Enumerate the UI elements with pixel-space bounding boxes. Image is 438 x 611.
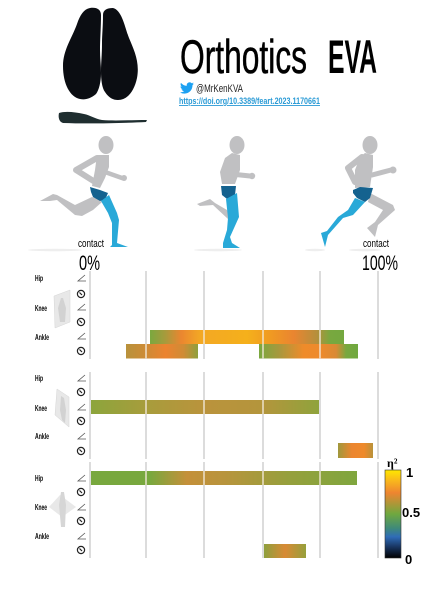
title: EVA [328, 30, 377, 83]
twitter handle: @MrKenKVA [196, 83, 243, 95]
rear leg [40, 194, 102, 216]
grid lines [90, 271, 378, 359]
title: Orthotics [180, 30, 307, 83]
torso [220, 153, 240, 184]
0 percent label: 0% [79, 252, 100, 275]
joint labels: Ankle [35, 532, 49, 541]
runner: initial contact [28, 136, 128, 251]
joint labels: Hip [35, 374, 43, 383]
icon: plane body [49, 492, 76, 527]
panel: sagittal plane [35, 271, 378, 359]
legend ticks: 0 [405, 552, 412, 567]
arms [76, 158, 127, 182]
contact label left: contact [78, 238, 104, 250]
heat bars [126, 330, 358, 358]
joint labels: Hip [35, 474, 43, 483]
runner: toe off [305, 136, 396, 251]
heat bars [91, 471, 357, 558]
angle and moment icons [77, 475, 86, 554]
rear leg [197, 199, 231, 219]
angle and moment icons [77, 275, 86, 355]
rear leg [367, 193, 395, 237]
icon: left insole [63, 8, 101, 99]
doi link: https://doi.org/10.3389/feart.2023.1170661 [179, 96, 320, 106]
legend ticks: 0.5 [402, 505, 420, 520]
shorts [221, 186, 236, 199]
icon: insole side view [59, 112, 147, 123]
head [230, 136, 244, 154]
front leg [321, 198, 365, 247]
100 percent label: 100% [362, 252, 398, 275]
joint labels: Ankle [35, 432, 49, 441]
head [98, 136, 114, 154]
torso [355, 153, 373, 188]
joint labels: Knee [35, 404, 47, 413]
angle and moment icons [77, 375, 86, 455]
icon: plane body [54, 290, 70, 328]
torso [92, 155, 109, 188]
arm [231, 173, 255, 179]
joint labels [35, 474, 49, 541]
shorts [353, 187, 373, 202]
head [362, 136, 378, 154]
front leg [223, 193, 240, 248]
icon: plane body [55, 389, 69, 427]
joint labels: Knee [35, 503, 47, 512]
shorts [90, 187, 108, 201]
legend ticks: 1 [406, 465, 413, 480]
legend title: η² [387, 456, 398, 470]
joint labels: Hip [35, 274, 43, 283]
contact label right: contact [363, 238, 389, 250]
front leg [101, 195, 128, 247]
joint labels: Knee [35, 304, 47, 313]
colour scale legend [385, 456, 420, 567]
heat bars [91, 400, 373, 458]
runner: mid stance [194, 136, 255, 251]
joint labels [35, 274, 49, 342]
panel: frontal plane [35, 372, 378, 459]
panel: transverse plane [35, 462, 378, 558]
joint labels: Ankle [35, 333, 49, 342]
arms [348, 157, 396, 182]
insoles photo [59, 8, 147, 123]
grid lines [90, 372, 378, 459]
colour bar [385, 470, 401, 558]
joint labels [35, 374, 49, 441]
icon: right insole [101, 8, 138, 100]
grid lines [90, 462, 378, 558]
legend ticks [402, 465, 420, 567]
icon: twitter bird [180, 82, 194, 94]
